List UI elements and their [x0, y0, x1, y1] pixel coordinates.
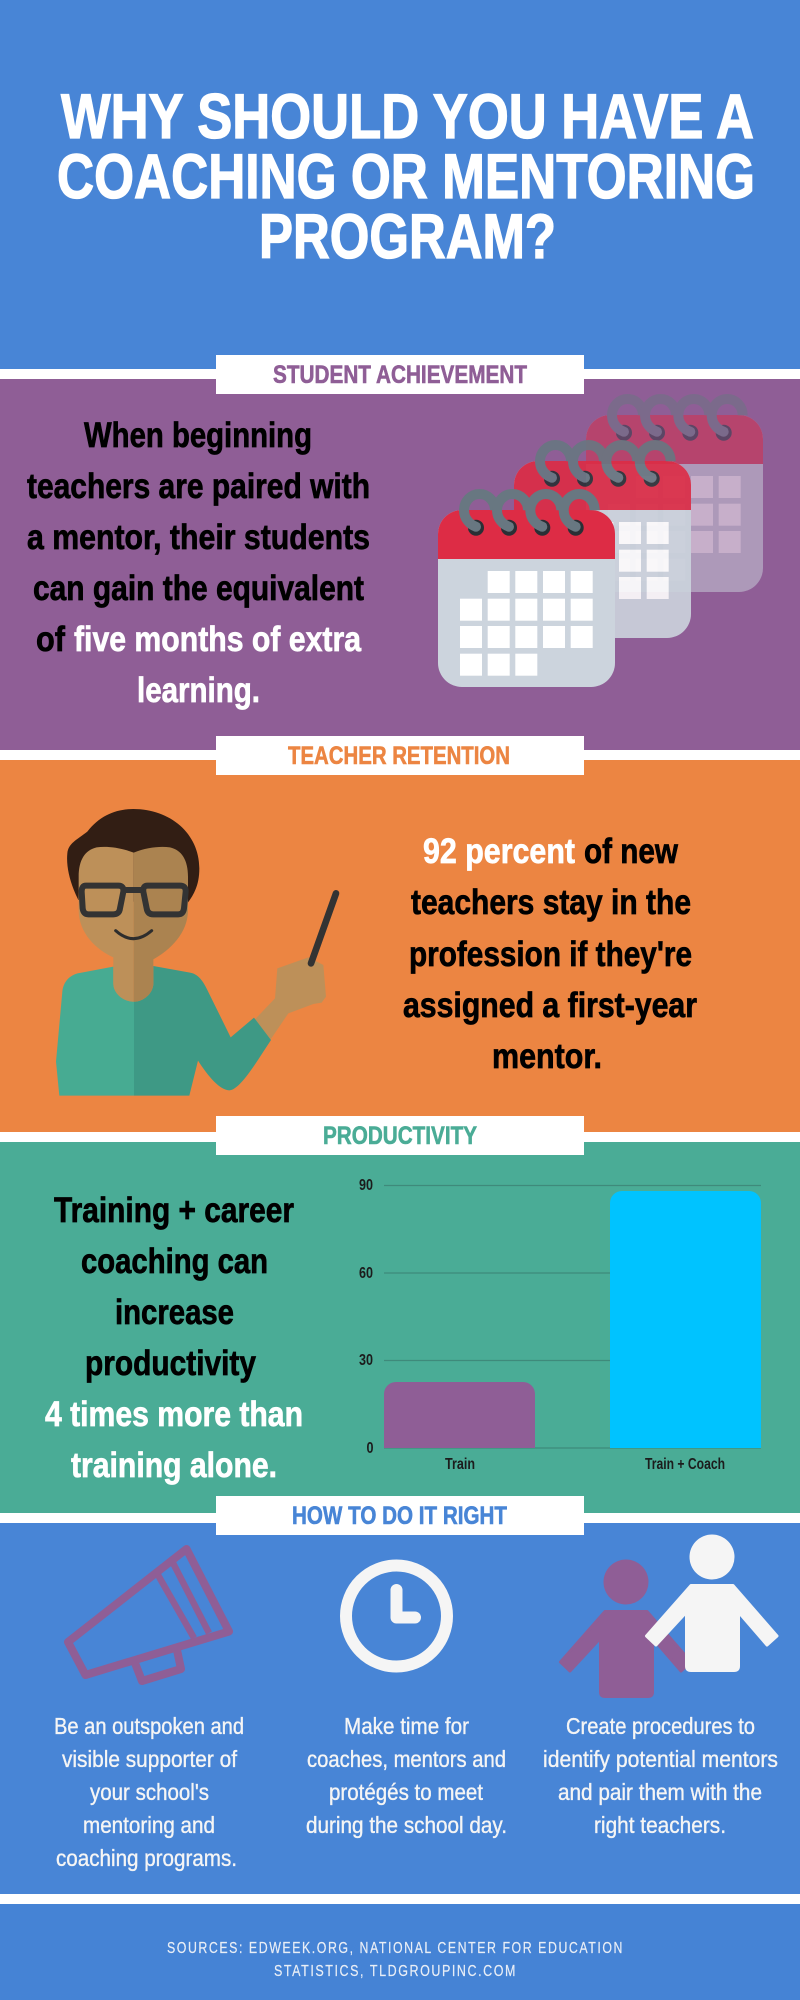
panel: sources footer — [0, 1904, 800, 2000]
text: make time: during the school day. — [306, 1812, 507, 1838]
panel: how to do it right — [0, 1496, 800, 1894]
text: productivity statistic: coaching can — [81, 1242, 268, 1281]
icon: teacher with pointer — [56, 809, 336, 1096]
text: mentor statistic: learning. — [137, 671, 260, 710]
text: create procedures: and pair them with the — [558, 1779, 762, 1805]
text: be an outspoken supporter: mentoring and — [83, 1812, 215, 1838]
text: mentor statistic: can gain the equivalent — [33, 569, 364, 608]
heading tab: productivity: PRODUCTIVITY — [323, 1122, 477, 1150]
panel: teacher retention — [0, 736, 800, 1132]
text: make time: Make time for — [344, 1713, 469, 1739]
text: be an outspoken supporter: your school's — [90, 1779, 209, 1805]
text: sources — [167, 1940, 624, 1980]
icon: mentor and protege — [560, 1534, 777, 1696]
text: productivity statistic: increase — [115, 1293, 234, 1332]
text: mentor statistic — [27, 416, 370, 710]
bar chart: 0 — [366, 1440, 374, 1457]
text: retention statistic: mentor. — [492, 1037, 602, 1076]
bar chart: 90 — [359, 1177, 373, 1194]
icon: clock — [346, 1566, 447, 1666]
bar chart: Train — [445, 1456, 475, 1473]
text: make time — [306, 1713, 507, 1838]
text: mentor statistic: five months of extra — [74, 620, 361, 659]
heading tab: how to do it right — [216, 1496, 584, 1535]
heading tab: student achievement — [216, 355, 584, 394]
text: retention statistic — [403, 832, 697, 1076]
text: retention statistic: 92 percent — [423, 832, 575, 871]
text: retention statistic: teachers stay in the — [411, 883, 691, 922]
text: make time: coaches, mentors and — [307, 1746, 506, 1772]
bar: train + coach — [610, 1191, 761, 1448]
text: create procedures: right teachers. — [594, 1812, 726, 1838]
heading tab: teacher retention — [216, 736, 584, 775]
text: be an outspoken supporter — [54, 1713, 244, 1871]
heading tab: teacher retention: TEACHER RETENTION — [288, 742, 510, 770]
text: productivity statistic: Training + career — [54, 1191, 294, 1230]
text: make time: protégés to meet — [329, 1779, 484, 1805]
heading tab: productivity — [216, 1116, 584, 1155]
text: be an outspoken supporter: visible supporter of — [62, 1746, 238, 1772]
text: be an outspoken supporter: coaching programs. — [56, 1845, 237, 1871]
text: productivity statistic — [45, 1191, 303, 1485]
text: create procedures: Create procedures to — [566, 1713, 755, 1739]
text: sources: SOURCES: EDWEEK.ORG, NATIONAL CENTER FOR EDUCATION — [167, 1940, 624, 1957]
text: mentor statistic: teachers are paired with — [27, 467, 370, 506]
text: be an outspoken supporter: Be an outspoken and — [54, 1713, 244, 1739]
text: mentor statistic: a mentor, their students — [27, 518, 370, 557]
panel: productivity — [0, 1116, 800, 1513]
header background — [0, 0, 800, 369]
title: PROGRAM? — [259, 202, 556, 272]
title — [57, 82, 755, 272]
text: sources: STATISTICS, TLDGROUPINC.COM — [274, 1963, 517, 1980]
text: mentor statistic: When beginning — [84, 416, 312, 455]
icon: calendars — [438, 399, 763, 687]
bar chart: 60 — [359, 1265, 373, 1282]
text: retention statistic: assigned a first-year — [403, 986, 697, 1025]
heading tab: how to do it right: HOW TO DO IT RIGHT — [292, 1502, 507, 1530]
text: productivity statistic: training alone. — [71, 1446, 277, 1485]
bar chart: Train + Coach — [645, 1456, 725, 1473]
heading tab: student achievement: STUDENT ACHIEVEMENT — [273, 361, 527, 389]
text: retention statistic: of new — [584, 832, 679, 871]
text: productivity statistic: productivity — [85, 1344, 256, 1383]
bar: train — [384, 1382, 535, 1448]
bar chart: 30 — [359, 1352, 373, 1369]
text: productivity statistic: 4 times more than — [45, 1395, 303, 1434]
text: mentor statistic: of — [36, 620, 65, 659]
bar chart — [359, 1177, 761, 1473]
text: retention statistic: profession if they're — [409, 935, 692, 974]
icon: megaphone — [68, 1549, 229, 1681]
text: create procedures — [543, 1713, 778, 1838]
text: create procedures: identify potential mentors — [543, 1746, 778, 1772]
panel: student achievement — [0, 355, 800, 750]
